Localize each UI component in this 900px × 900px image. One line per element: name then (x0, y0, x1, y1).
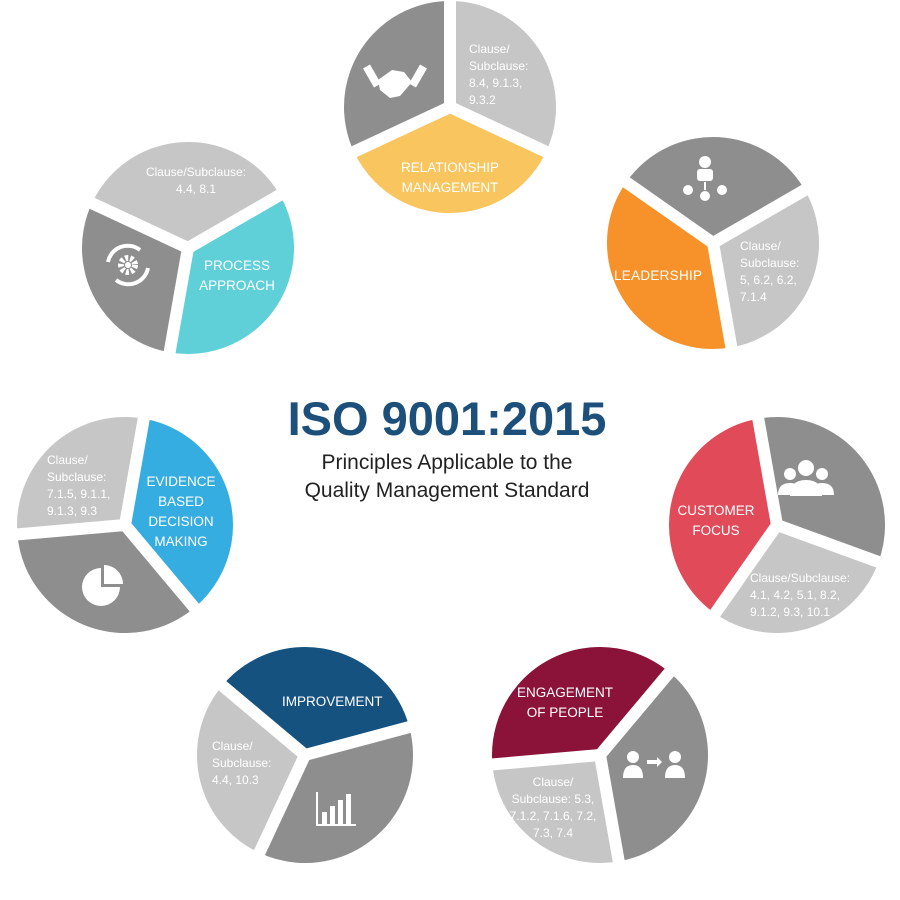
label: RELATIONSHIP (401, 160, 499, 175)
text: clause: Clause/ (740, 239, 781, 253)
panel: relationship management (346, 0, 554, 195)
text: clause: Clause/ (533, 775, 574, 789)
text: clause: Clause/ (212, 739, 253, 753)
subtitle: Principles Applicable to the (322, 451, 572, 474)
label: EVIDENCE (146, 474, 216, 489)
text: clause: 5, 6.2, 6.2, (740, 273, 797, 287)
label: LEADERSHIP (614, 268, 702, 283)
panel: process approach (84, 165, 288, 361)
icon: pie chart (82, 565, 123, 606)
icon: hierarchy (683, 156, 727, 201)
label: ENGAGEMENT (517, 685, 613, 700)
label: CUSTOMER (677, 503, 755, 518)
label: APPROACH (199, 278, 275, 293)
icon: bar chart (316, 792, 356, 826)
icon: group (778, 460, 834, 496)
text: clause: 7.1.5, 9.1.1, (47, 487, 110, 501)
label: MAKING (154, 534, 208, 549)
label: OF PEOPLE (527, 705, 603, 720)
text: clause: Clause/ (469, 42, 510, 56)
label: MANAGEMENT (402, 180, 498, 195)
panel: improvement (212, 679, 419, 862)
text: clause: 9.1.2, 9.3, 10.1 (750, 605, 830, 619)
label: PROCESS (204, 258, 270, 273)
icon: people exchange (623, 751, 685, 778)
text: clause: Subclause: (469, 59, 528, 73)
panel: customer focus (677, 409, 888, 622)
panel: leadership (614, 156, 813, 356)
text: clause: 8.4, 9.1.3, (469, 76, 522, 90)
label: IMPROVEMENT (282, 694, 383, 709)
text: clause: 7.1.4 (740, 290, 767, 304)
text: clause: 7.3, 7.4 (533, 826, 573, 840)
text: clause: Clause/Subclause: (146, 165, 246, 179)
text: clause: 4.4, 8.1 (176, 182, 216, 196)
text: clause: Subclause: (47, 470, 106, 484)
text: clause: Clause/Subclause: (750, 571, 850, 585)
panel: engagement of people (482, 665, 685, 871)
text: clause: 4.4, 10.3 (212, 773, 259, 787)
text: clause: Subclause: (212, 756, 271, 770)
text: clause: Subclause: 5.3, (512, 792, 594, 806)
text: clause: Clause/ (47, 453, 88, 467)
label: FOCUS (692, 523, 740, 538)
text: clause: Subclause: (740, 256, 799, 270)
label: BASED (158, 494, 204, 509)
panel: evidence based decision making (7, 409, 216, 615)
icon: handshake (363, 64, 427, 98)
icon: gear cycle (108, 246, 148, 284)
text: clause: 9.1.3, 9.3 (47, 504, 97, 518)
text: clause: 7.1.2, 7.1.6, 7.2, (510, 809, 596, 823)
text: clause: 4.1, 4.2, 5.1, 8.2, (750, 588, 840, 602)
label: DECISION (148, 514, 214, 529)
text: clause: 9.3.2 (469, 93, 496, 107)
subtitle: Quality Management Standard (305, 479, 589, 502)
title: ISO 9001:2015 (288, 392, 606, 445)
